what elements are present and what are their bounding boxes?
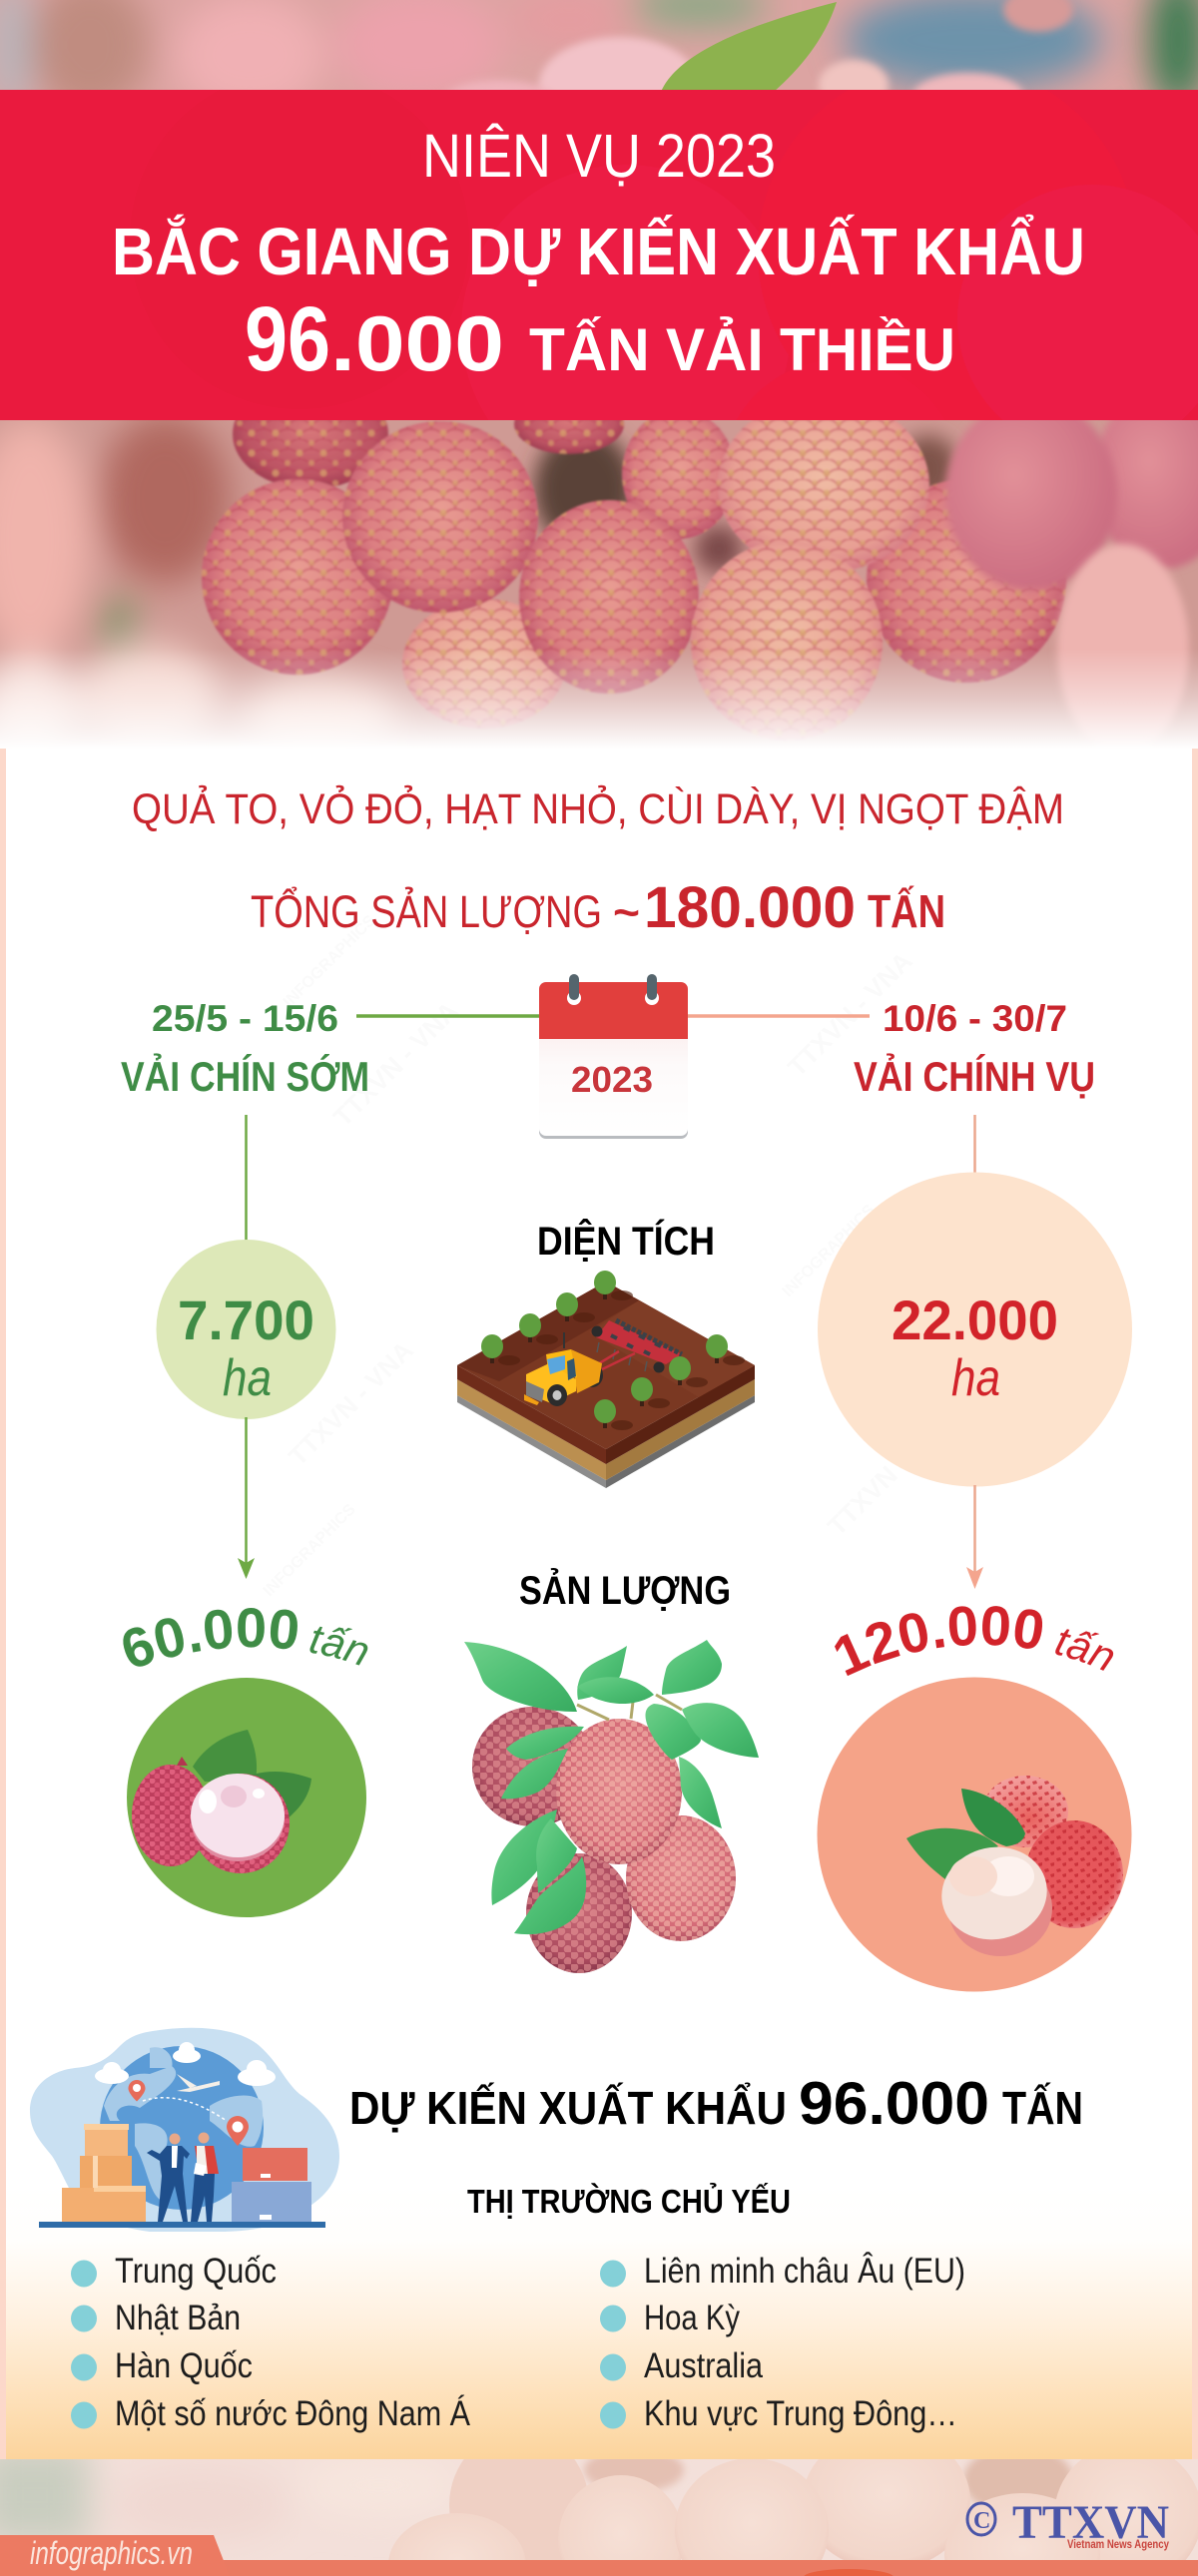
leaves	[193, 1730, 257, 1782]
early lychee line to area	[245, 1115, 248, 1243]
circle: main season area: 22.000	[892, 1288, 1058, 1351]
logo: TTXVN: Vietnam News Agency	[1067, 2537, 1169, 2551]
timeline left: early lychee dates: 25/5 - 15/6	[152, 998, 338, 1039]
title line 1: NIÊN VỤ 2023	[422, 122, 776, 190]
market: Hoa Kỳ	[600, 2299, 740, 2337]
faint watermarks: INFOGRAPHICS	[780, 1202, 879, 1300]
total output line: TỔNG SẢN LƯỢNG	[251, 886, 602, 937]
market: Nhật Bản: Nhật Bản	[115, 2299, 241, 2337]
market: Australia: Australia	[644, 2346, 763, 2385]
faint watermarks: TTXVN - VNA	[327, 995, 464, 1132]
heading: area: DIỆN TÍCH	[537, 1218, 715, 1264]
whole fruit	[177, 1757, 188, 1766]
plane	[177, 2074, 220, 2092]
arrow: early area to output	[238, 1417, 255, 1579]
bottom peach gradient	[0, 2186, 1198, 2460]
heading: output: SẢN LƯỢNG	[519, 1567, 731, 1613]
circle: early lychee area: 7.700	[178, 1288, 314, 1351]
market: EU: Liên minh châu Âu (EU)	[644, 2252, 965, 2291]
market: Trung Đông: Khu vực Trung Đông…	[644, 2394, 957, 2433]
circle: early lychee area: ha	[223, 1349, 272, 1407]
market list left	[71, 2252, 471, 2433]
icon: calendar 2023	[539, 974, 688, 1139]
harrow	[591, 1320, 682, 1373]
title line 2: BẮC GIANG DỰ KIẾN XUẤT KHẨU	[112, 215, 1085, 289]
logo: TTXVN: TTXVN	[1012, 2496, 1169, 2549]
total output line: 180.000	[644, 875, 856, 940]
location pins	[128, 2080, 146, 2102]
faint watermarks: TTXVN - VNA	[822, 1404, 958, 1541]
circle: early lychee area	[156, 1240, 335, 1419]
side strip right	[1192, 744, 1198, 2460]
connector salmon	[686, 1014, 870, 1018]
timeline right: main season dates: 10/6 - 30/7	[883, 998, 1067, 1039]
leaves	[464, 1640, 759, 1934]
heading: export forecast	[349, 2070, 1083, 2137]
trees	[481, 1271, 728, 1428]
heading: export forecast: 96.000	[799, 2070, 989, 2137]
stacked boxes	[62, 2124, 146, 2222]
heading: export forecast: DỰ KIẾN XUẤT KHẨU	[349, 2082, 787, 2134]
continents	[104, 2047, 263, 2201]
platform	[39, 2222, 325, 2228]
red title banner	[0, 90, 1198, 420]
business people	[147, 2132, 219, 2222]
title line 3 unit: TẤN VẢI THIỀU	[529, 316, 955, 383]
market: Nhật Bản	[71, 2299, 241, 2337]
title line 3 decimals: .000	[330, 299, 504, 387]
main season line to area	[973, 1115, 976, 1176]
curved label: 120.000 tấn: 120.000tấn	[835, 1606, 1114, 1677]
hero photo of lychees	[0, 420, 1198, 749]
faint watermarks: INFOGRAPHICS	[590, 1022, 689, 1121]
leaves	[961, 1789, 1025, 1846]
illustration: global export logistics	[30, 2028, 339, 2232]
faint watermarks: TTXVN - VNA	[283, 1334, 419, 1471]
heading: main markets: THỊ TRƯỜNG CHỦ YẾU	[467, 2183, 791, 2220]
fruit: right lower	[626, 1815, 736, 1941]
fruit: back left	[472, 1707, 594, 1826]
faint watermarks	[261, 912, 958, 1600]
label early lychee: VẢI CHÍN SỚM	[121, 1052, 369, 1100]
subtitle: fruit qualities: QUẢ TO, VỎ ĐỎ, HẠT NHỎ, CÙI DÀY, VỊ NGỌT ĐẬM	[132, 784, 1064, 833]
route	[143, 2098, 227, 2121]
market list right	[600, 2252, 965, 2433]
leaf in photo	[661, 2, 837, 92]
logo: TTXVN: C	[973, 2508, 990, 2534]
title line 3 number: 96	[245, 288, 330, 390]
market: Đông Nam Á: Một số nước Đông Nam Á	[115, 2394, 471, 2433]
curved label: 120.000 tấn	[835, 1606, 1114, 1677]
top photo strip	[0, 0, 1198, 90]
clouds	[95, 2042, 276, 2086]
tag: infographics.vn: infographics.vn	[30, 2535, 193, 2571]
faint watermarks: INFOGRAPHICS	[261, 1501, 359, 1600]
heading: export forecast: TẤN	[1002, 2082, 1083, 2134]
circle: main season area	[818, 1172, 1132, 1487]
illustration: lychee branch	[464, 1640, 759, 1973]
label main season lychee: VẢI CHÍNH VỤ	[854, 1052, 1095, 1100]
tractor	[524, 1332, 603, 1406]
circle: early lychee output	[127, 1678, 366, 1917]
market: Hàn Quốc: Hàn Quốc	[115, 2346, 253, 2385]
side strip left	[0, 744, 6, 2460]
curved label: 60.000 tấn: 60.000tấn	[123, 1608, 367, 1667]
footer photo	[0, 2459, 1198, 2576]
darker background fruits	[581, 2459, 1073, 2504]
footer red band	[224, 2560, 1198, 2576]
back fruit	[982, 1776, 1068, 1847]
icon: calendar 2023: 2023	[571, 1059, 653, 1100]
globe	[100, 2046, 264, 2210]
total output line	[251, 875, 945, 940]
market: Hàn Quốc	[71, 2346, 253, 2385]
market: Hoa Kỳ: Hoa Kỳ	[644, 2299, 740, 2337]
tree shadows	[498, 1290, 745, 1430]
fruit: main	[556, 1719, 682, 1864]
right fruit	[1025, 1820, 1123, 1928]
fruit: bottom	[526, 1853, 632, 1973]
market: Trung Quốc: Trung Quốc	[115, 2252, 277, 2291]
total output line: ~	[613, 888, 640, 937]
blob background	[30, 2028, 339, 2232]
faint watermarks: TTXVN - VNA	[782, 945, 918, 1082]
stems	[577, 1695, 682, 1720]
total output line: TẤN	[868, 885, 945, 937]
dark gaps between fruits	[534, 429, 958, 573]
faint watermarks: INFOGRAPHICS	[281, 912, 379, 1011]
arrow: main area to output	[966, 1485, 983, 1589]
market: Australia	[600, 2346, 763, 2385]
circle: main season output	[817, 1677, 1132, 1992]
peel and flesh	[948, 1860, 1052, 1956]
icon: isometric farm field	[457, 1271, 755, 1488]
curved label: 60.000 tấn	[123, 1608, 367, 1667]
connector green	[356, 1014, 541, 1018]
circle: main season area: ha	[951, 1349, 1000, 1407]
containers	[232, 2148, 311, 2222]
peeled fruit	[192, 1774, 290, 1873]
